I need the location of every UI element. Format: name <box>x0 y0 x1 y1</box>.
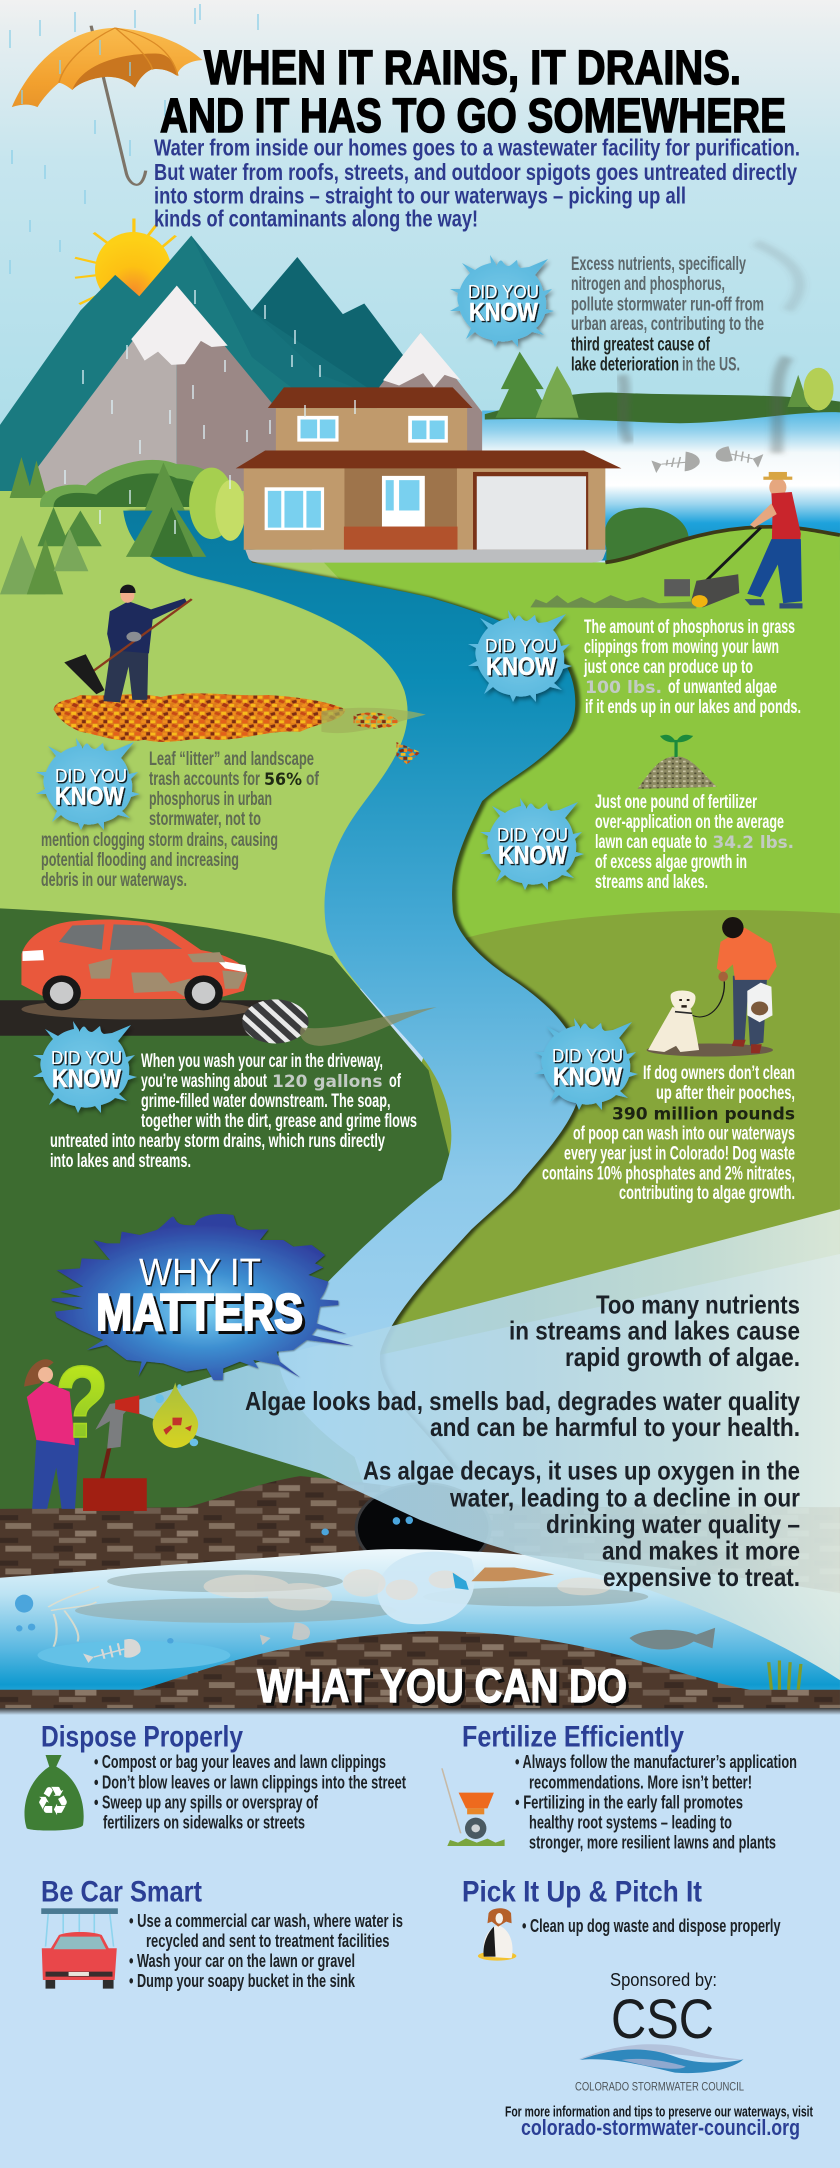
intro text: into storm drains – straight to our waterways – picking up all <box>154 182 686 208</box>
bullets <box>94 1751 406 1832</box>
mountains <box>0 236 514 500</box>
did you know: nutrients: KNOW <box>469 298 538 326</box>
intro text: kinds of contaminants along the way! <box>154 206 478 232</box>
icon: fish skeletons <box>651 446 763 473</box>
pine <box>54 528 88 571</box>
text: leaf litter: debris in our waterways. <box>41 870 187 891</box>
mud splats <box>88 952 246 997</box>
icon: sun <box>75 218 176 308</box>
lake <box>482 352 840 560</box>
shaft <box>91 26 146 185</box>
figure: dog walker <box>647 917 777 1057</box>
jeans <box>103 648 148 702</box>
wheels <box>42 975 223 1010</box>
icon: bag <box>24 1755 84 1831</box>
face <box>38 1367 53 1382</box>
hair <box>24 1359 54 1387</box>
hose stem <box>102 1445 110 1480</box>
text: fertilizer: streams and lakes. <box>595 872 708 893</box>
olive lawn <box>375 910 840 1356</box>
sponsor: Sponsored by: <box>610 1970 717 1990</box>
leaves scatter <box>354 712 421 764</box>
bullets: • Don’t blow leaves or lawn clippings into the street <box>94 1772 406 1792</box>
jeans <box>32 1438 79 1509</box>
rain over mountains <box>65 290 355 534</box>
dog face <box>679 999 689 1008</box>
canopy <box>12 28 202 107</box>
car body <box>21 920 247 999</box>
did you know: car washing: KNOW <box>52 1065 121 1093</box>
text: car washing <box>50 1051 417 1172</box>
trees and bushes left <box>0 457 245 594</box>
tip: pick it up <box>462 1876 781 1961</box>
logo waves <box>579 2044 744 2073</box>
text: dog waste: 390 million pounds <box>612 1104 795 1124</box>
nozzle head <box>115 1395 139 1414</box>
pine group lower left <box>0 536 46 594</box>
council name: COLORADO STORMWATER COUNCIL <box>575 2080 744 2094</box>
leaves pile <box>54 693 346 742</box>
banner shadow <box>0 1708 840 1715</box>
mower deck <box>691 574 739 607</box>
smoke plume <box>755 243 799 453</box>
fish bones <box>94 1643 124 1659</box>
bullets <box>515 1751 797 1852</box>
bullets: • Wash your car on the lawn or gravel <box>129 1950 355 1971</box>
smoke <box>621 375 629 443</box>
did you know: dog waste <box>534 1018 638 1110</box>
steps <box>344 527 457 550</box>
lower soil <box>0 1631 840 1709</box>
why it matters text: water, leading to a decline in our <box>449 1482 800 1512</box>
glass <box>301 419 445 439</box>
waste <box>751 1001 768 1015</box>
text: grass clippings <box>583 617 801 718</box>
text: car washing: grime-filled water downstream. The soap, <box>141 1091 390 1112</box>
umbrella <box>12 26 202 185</box>
bullets: recommendations. More isn’t better! <box>529 1772 752 1792</box>
foam <box>204 1569 611 1610</box>
why it matters text: rapid growth of algae. <box>565 1342 800 1372</box>
light lawn left <box>0 491 455 989</box>
head and hat <box>750 472 801 560</box>
did you know: leaf litter: DID YOU <box>55 766 127 786</box>
legs and mower <box>530 528 802 609</box>
blue splat <box>52 1214 353 1380</box>
text: nutrients: third greatest cause of <box>571 334 710 356</box>
sponsor <box>575 1970 744 2094</box>
pants <box>733 976 767 1046</box>
text: leaf litter: of <box>306 769 319 790</box>
garage frame <box>473 472 588 550</box>
icon: car wash <box>41 1908 118 1989</box>
why it matters text: in streams and lakes cause <box>509 1316 800 1346</box>
pipe <box>356 1483 490 1573</box>
head <box>722 917 744 938</box>
tip: fertilize efficiently <box>442 1720 797 1852</box>
title: WHEN IT RAINS, IT DRAINS. <box>204 42 741 95</box>
upper windows <box>297 416 448 443</box>
text: fertilizer: lawn can equate to <box>595 832 707 853</box>
text: nutrients: in the US. <box>682 354 740 376</box>
text: dog waste <box>542 1063 795 1204</box>
did you know: nutrients: DID YOU <box>468 282 539 302</box>
text: nutrients <box>571 254 764 376</box>
left window <box>265 487 324 530</box>
text: grass clippings: just once can produce up to <box>583 657 753 678</box>
did you know: fertilizer <box>480 798 584 890</box>
shirt <box>27 1381 75 1445</box>
icon: question mark: ? <box>55 1345 109 1459</box>
tip: be car smart: Be Car Smart <box>41 1876 202 1908</box>
round tree <box>189 468 234 539</box>
did you know: fertilizer: DID YOU <box>497 825 568 845</box>
leash <box>688 981 724 1017</box>
face <box>121 587 134 603</box>
did you know: grass clippings <box>468 610 572 702</box>
lower wall centre <box>344 468 457 527</box>
fish <box>629 1628 715 1650</box>
why it matters text: and makes it more <box>602 1536 800 1566</box>
door <box>382 476 425 527</box>
hedge <box>605 508 689 560</box>
text: car washing: When you wash your car in the driveway, <box>141 1051 383 1072</box>
bullets <box>129 1910 403 1991</box>
rake head <box>64 654 104 694</box>
collar <box>675 1012 692 1013</box>
bullets: • Compost or bag your leaves and lawn clippings <box>94 1751 386 1772</box>
text: fertilizer: of excess algae growth in <box>595 852 747 873</box>
ground and river <box>0 491 840 1519</box>
leaves base <box>54 693 346 742</box>
text: leaf litter: Leaf “litter” and landscape <box>149 749 314 770</box>
why it matters text: expensive to treat. <box>603 1562 800 1592</box>
tip: dispose properly: Dispose Properly <box>41 1720 243 1754</box>
light beam <box>137 1209 840 1680</box>
germs <box>163 1418 192 1435</box>
dead animal <box>471 1567 554 1581</box>
shirt <box>717 928 777 980</box>
text: leaf litter: 56% <box>264 770 302 790</box>
figure: woman with question mark <box>24 1359 198 1511</box>
did you know: fertilizer: KNOW <box>498 842 567 870</box>
bullets: • Use a commercial car wash, where water is <box>129 1910 403 1931</box>
roots <box>48 1586 99 1647</box>
text: leaf litter: trash accounts for <box>149 769 260 790</box>
why it matters text: Too many nutrients <box>596 1290 800 1320</box>
icon: fertilizer pile and sprout <box>637 735 717 789</box>
did you know: nutrients <box>450 255 554 347</box>
pine <box>27 539 63 594</box>
house base <box>245 550 606 563</box>
fish skeleton 2 <box>260 1623 310 1645</box>
reeds <box>769 1660 801 1690</box>
upper roof <box>268 387 472 408</box>
text: nutrients: Excess nutrients, specifically <box>571 254 746 275</box>
hair <box>120 585 136 593</box>
what you can do banner: WHAT YOU CAN DO <box>257 1659 627 1712</box>
text: leaf litter: potential flooding and increasing <box>41 850 239 871</box>
bullets: healthy root systems – leading to <box>529 1812 732 1832</box>
tree <box>536 366 579 418</box>
bullets: • Sweep up any spills or overspray of <box>94 1792 319 1812</box>
house <box>236 387 621 563</box>
garage door <box>477 476 586 550</box>
bubbles <box>15 1516 413 1644</box>
dirty runoff <box>300 1007 437 1046</box>
hoodie <box>107 598 187 653</box>
dark lawn left <box>0 908 455 1519</box>
why it matters <box>52 1214 353 1380</box>
did you know: car washing <box>33 1021 137 1113</box>
lower roof <box>236 451 621 468</box>
intro text <box>154 134 800 232</box>
upper wall <box>276 408 467 453</box>
text: nutrients: lake deterioration <box>571 354 679 376</box>
matters: MATTERS <box>96 1284 303 1342</box>
tip: dispose properly <box>24 1720 406 1832</box>
droplets <box>155 1384 198 1446</box>
footer <box>505 2104 813 2140</box>
door glass <box>386 480 419 511</box>
lawn edge <box>605 527 840 562</box>
lower wall <box>244 468 605 550</box>
text: fertilizer: 34.2 lbs. <box>712 833 794 853</box>
tree <box>496 352 552 418</box>
mower handle <box>703 528 761 584</box>
tip: be car smart <box>41 1876 403 1991</box>
text: leaf litter: mention clogging storm drains, causing <box>41 830 278 851</box>
river <box>123 511 581 1470</box>
text: leaf litter <box>41 749 319 891</box>
underside <box>72 54 177 90</box>
text: car washing: untreated into nearby storm drains, which runs directly <box>50 1131 385 1152</box>
blue patch <box>453 1573 469 1590</box>
dog body <box>648 1007 699 1052</box>
text: nutrients: nitrogen and phosphorus, <box>571 274 725 295</box>
text: car washing: together with the dirt, grease and grime flows <box>141 1111 417 1132</box>
text: car washing: into lakes and streams. <box>50 1151 191 1172</box>
mud puddle <box>21 999 252 1019</box>
why it matters text: drinking water quality – <box>546 1509 800 1539</box>
sewer outflow <box>378 1552 475 1624</box>
why it matters ground <box>0 1476 840 1709</box>
figure: car in driveway <box>0 920 437 1046</box>
sky <box>0 0 840 540</box>
tip: fertilize efficiently: Fertilize Efficiently <box>462 1720 684 1754</box>
engine <box>664 579 690 596</box>
bag <box>747 983 772 1022</box>
did you know: dog waste: DID YOU <box>552 1046 623 1066</box>
fish skeleton <box>83 1639 141 1663</box>
headlights <box>22 950 246 972</box>
bullets: fertilizers on sidewalks or streets <box>103 1812 305 1832</box>
bullets: • Dump your soapy bucket in the sink <box>129 1970 355 1991</box>
text: car washing: 120 gallons <box>272 1072 382 1092</box>
rake <box>91 599 192 673</box>
pond shallow <box>37 1641 230 1670</box>
glove <box>126 632 141 642</box>
lawn right <box>241 527 840 948</box>
nozzle handle <box>95 1400 137 1449</box>
ground shadow <box>647 1043 773 1057</box>
text: car washing: of <box>389 1071 401 1092</box>
did you know: dog waste: KNOW <box>553 1063 622 1091</box>
far pines <box>10 457 47 498</box>
icon: spreader <box>442 1768 505 1846</box>
leaves trail <box>321 708 426 733</box>
why it: WHY IT <box>139 1252 261 1294</box>
logo letters: CSC <box>611 1987 714 2050</box>
text: leaf litter: phosphorus in urban <box>149 789 272 810</box>
rain <box>10 4 258 274</box>
icon: beagle <box>478 1908 516 1961</box>
did you know: leaf litter: KNOW <box>55 782 124 810</box>
text: car washing: you’re washing about <box>141 1071 267 1092</box>
tree <box>804 368 834 411</box>
pine <box>150 507 193 557</box>
icon: bag: ♻ <box>36 1779 70 1825</box>
did you know: grass clippings: KNOW <box>486 653 556 681</box>
tree <box>787 375 809 407</box>
algae scum <box>75 1570 648 1623</box>
upper soil <box>0 1476 840 1614</box>
pine <box>126 462 206 557</box>
did you know: car washing: DID YOU <box>51 1048 122 1068</box>
left window glass <box>268 491 321 528</box>
did you know: grass clippings: DID YOU <box>485 636 557 656</box>
storm drain <box>242 999 309 1043</box>
text: leaf litter: stormwater, not to <box>149 809 261 830</box>
title <box>160 42 786 143</box>
ribs <box>59 28 178 83</box>
windows <box>59 924 182 950</box>
text: grass clippings: of unwanted algae <box>668 677 777 698</box>
dog head <box>671 990 695 1012</box>
bushes <box>40 460 238 507</box>
grass <box>530 595 696 609</box>
text: fertilizer: Just one pound of fertilizer <box>595 792 757 813</box>
did you know: leaf litter <box>36 738 140 830</box>
river shadow <box>128 511 586 1470</box>
why it matters text <box>245 1290 800 1592</box>
hand <box>718 972 728 981</box>
toolbox <box>83 1478 147 1511</box>
round tree <box>215 480 245 541</box>
figure: man raking leaves <box>54 585 426 764</box>
figure: man mowing lawn <box>530 472 802 609</box>
road <box>0 1000 271 1036</box>
text: grass clippings: 100 lbs. <box>585 678 662 698</box>
shoes <box>732 1040 762 1053</box>
mower wheel <box>692 595 708 607</box>
tip: pick it up: Pick It Up & Pitch It <box>462 1876 702 1908</box>
algae drop <box>153 1383 198 1448</box>
pine <box>37 507 102 546</box>
bullets: • Fertilizing in the early fall promotes <box>515 1792 743 1812</box>
pond <box>0 1549 840 1709</box>
bullets: recycled and sent to treatment facilities <box>146 1930 390 1951</box>
text: fertilizer <box>595 792 794 893</box>
